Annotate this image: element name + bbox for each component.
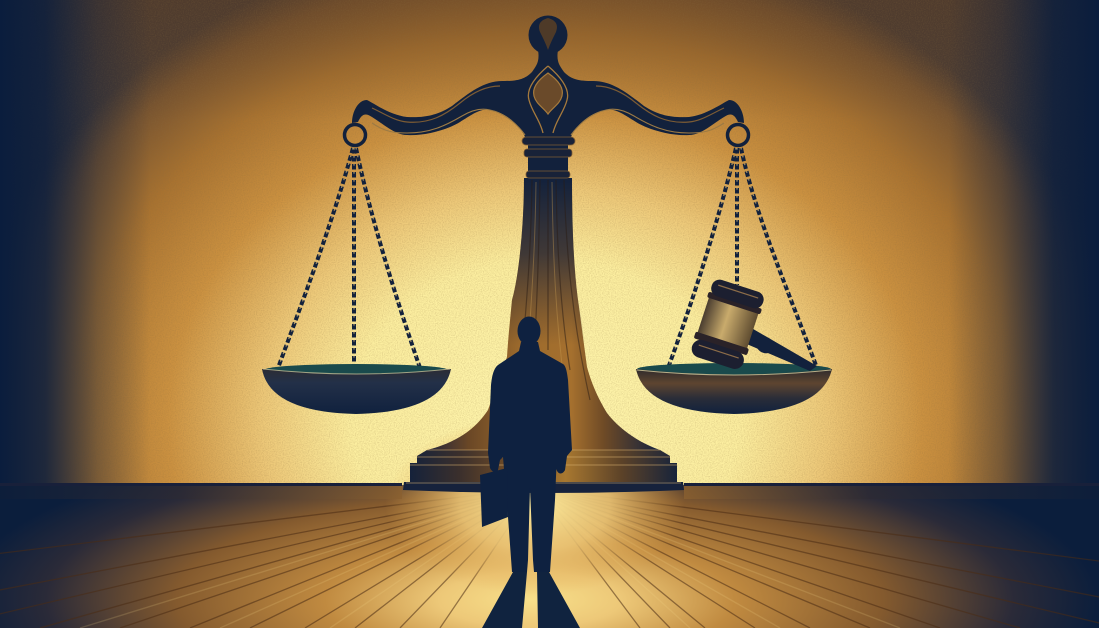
- right hanging ring and chains: [668, 124, 817, 368]
- icon: man's shadow: [482, 572, 580, 628]
- scale: base steps: [403, 450, 684, 493]
- floor with radiating boards: [0, 415, 1099, 628]
- man silhouette with briefcase: [480, 316, 580, 628]
- right pan: [636, 277, 832, 414]
- icon: gavel on right pan: [688, 277, 817, 372]
- left hanging ring and chains: [278, 124, 420, 372]
- scale: stand column: [427, 178, 660, 450]
- left pan: [262, 364, 451, 414]
- scale: beam and finial: [352, 16, 744, 137]
- icon: briefcase: [480, 468, 508, 527]
- scale: collar rings: [522, 137, 575, 178]
